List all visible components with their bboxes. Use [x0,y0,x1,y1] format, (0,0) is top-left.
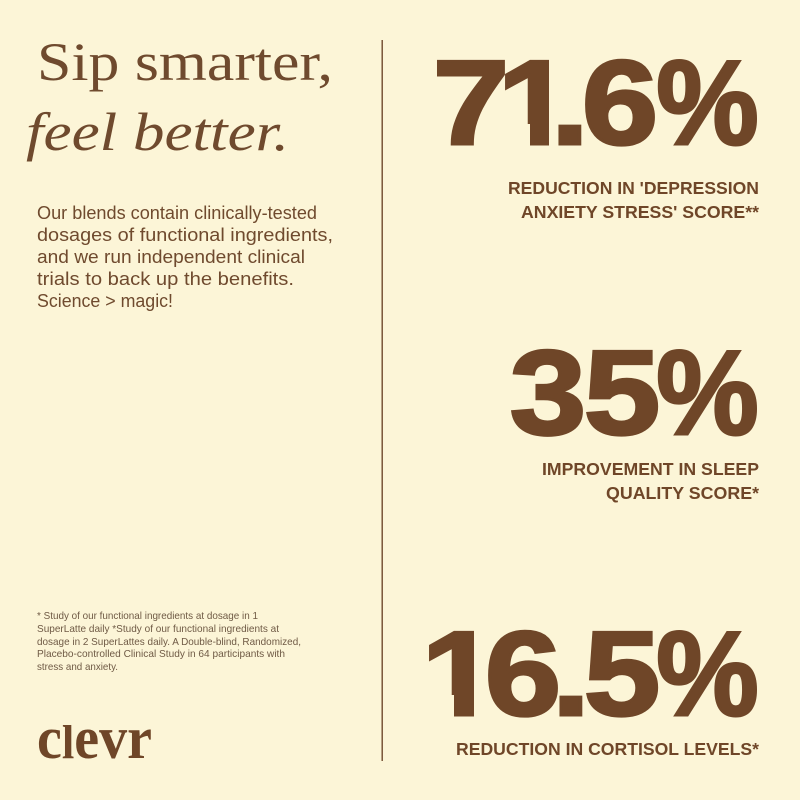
stat number: % [656,326,759,460]
footnote: SuperLatte daily *Study of our functional ingredients at [37,624,279,635]
intro text block [37,203,333,311]
stat number: 6.5 [485,607,660,741]
stat: 16.5% [429,630,759,755]
stat label [542,459,759,503]
stat number: % [656,607,759,741]
stat number [510,326,759,460]
stat: 71.6% [437,58,759,218]
stat label: ANXIETY STRESS' SCORE** [521,202,759,222]
footnote: * Study of our functional ingredients at dosage in 1 [37,611,258,622]
stat label [508,178,759,222]
intro text block: and we run independent clinical [37,247,305,267]
stat number: 35 [510,326,660,460]
stat number: 1 [497,36,574,170]
footnote [37,611,301,673]
footnote: Placebo-controlled Clinical Study in 64 participants with [37,649,285,660]
stat number [437,58,757,147]
stat label: REDUCTION IN 'DEPRESSION [508,178,759,198]
stat number: .6 [551,36,658,170]
logo: clevr: clevr [37,705,152,771]
footnote: stress and anxiety. [37,662,118,673]
stat: 35% [510,326,759,503]
title: feel better. [26,102,289,162]
intro text block: Our blends contain clinically-tested [37,203,317,223]
title: Sip smarter, [37,32,333,92]
stat number: 7 [433,36,509,170]
stat number: % [656,36,759,170]
footnote: dosage in 2 SuperLattes daily. A Double-blind, Randomized, [37,637,301,648]
title [26,32,333,162]
stat label: QUALITY SCORE* [606,483,759,503]
stat label: REDUCTION IN CORTISOL LEVELS* [456,739,759,759]
stat label: IMPROVEMENT IN SLEEP [542,459,759,479]
stat number: 1 [421,607,498,741]
stat number [429,630,757,718]
intro text block: Science > magic! [37,291,173,311]
intro text block: dosages of functional ingredients, [37,225,333,245]
intro text block: trials to back up the benefits. [37,269,294,289]
